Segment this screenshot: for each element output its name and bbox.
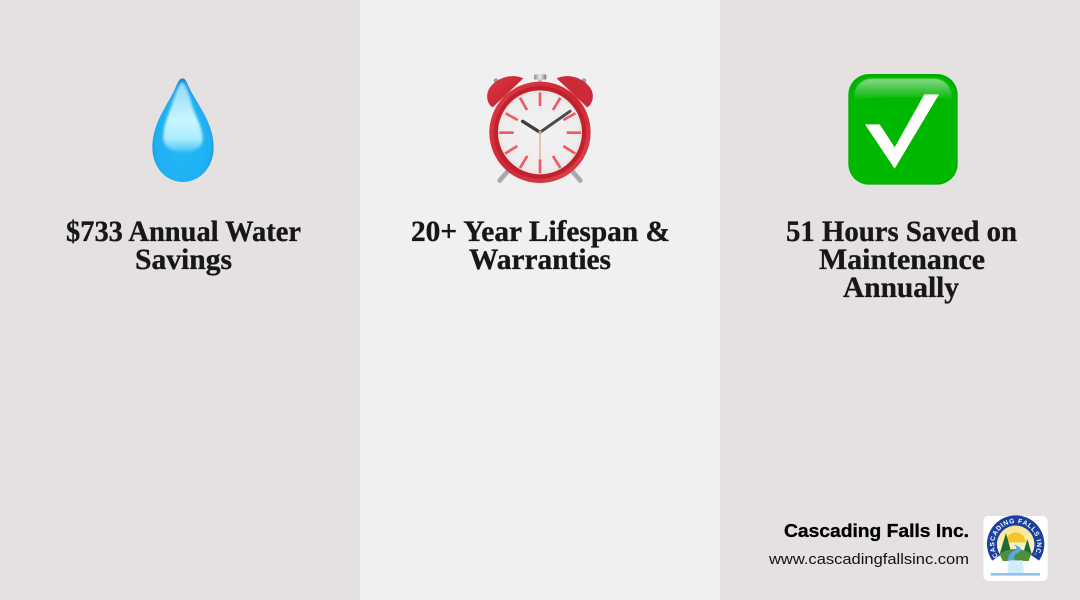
clock tick marks: [499, 92, 581, 173]
heading: annual water savings: Savings: [135, 243, 232, 276]
heading: hours saved on maintenance: 51 Hours Saved on: [786, 215, 1017, 248]
heading: annual water savings: [66, 215, 301, 276]
logo scene: [997, 526, 1034, 563]
panel: water savings background: [0, 0, 360, 600]
logo ring: [987, 515, 1044, 561]
clock ring: [489, 82, 591, 183]
clock hands: [523, 111, 570, 159]
heading: hours saved on maintenance: Maintenance: [819, 243, 985, 276]
panel: maintenance background: [720, 0, 1080, 600]
heading: lifespan and warranties: 20+ Year Lifespan &: [411, 215, 670, 248]
heading: lifespan and warranties: Warranties: [469, 243, 611, 276]
panel: lifespan background: [360, 0, 720, 600]
heading: hours saved on maintenance: [786, 215, 1017, 304]
left bell: [487, 76, 523, 107]
icon: water drop: [152, 78, 214, 182]
heading: annual water savings: $733 Annual Water: [66, 215, 301, 248]
clock top button: [534, 74, 546, 87]
logo lettering: CASCADING FALLS INC.: [990, 518, 1042, 558]
right bell: [557, 76, 593, 107]
clock feet: [500, 169, 580, 181]
footer: company name: Cascading Falls Inc.: [784, 521, 969, 541]
logo waterfall: [1007, 560, 1024, 574]
icon: alarm clock: [487, 74, 593, 183]
heading: lifespan and warranties: [411, 215, 670, 276]
icon: green check mark: [848, 74, 958, 185]
heading: hours saved on maintenance: Annually: [843, 271, 959, 304]
logo: Cascading Falls: [983, 515, 1048, 581]
footer: website url: www.cascadingfallsinc.com: [768, 551, 969, 568]
